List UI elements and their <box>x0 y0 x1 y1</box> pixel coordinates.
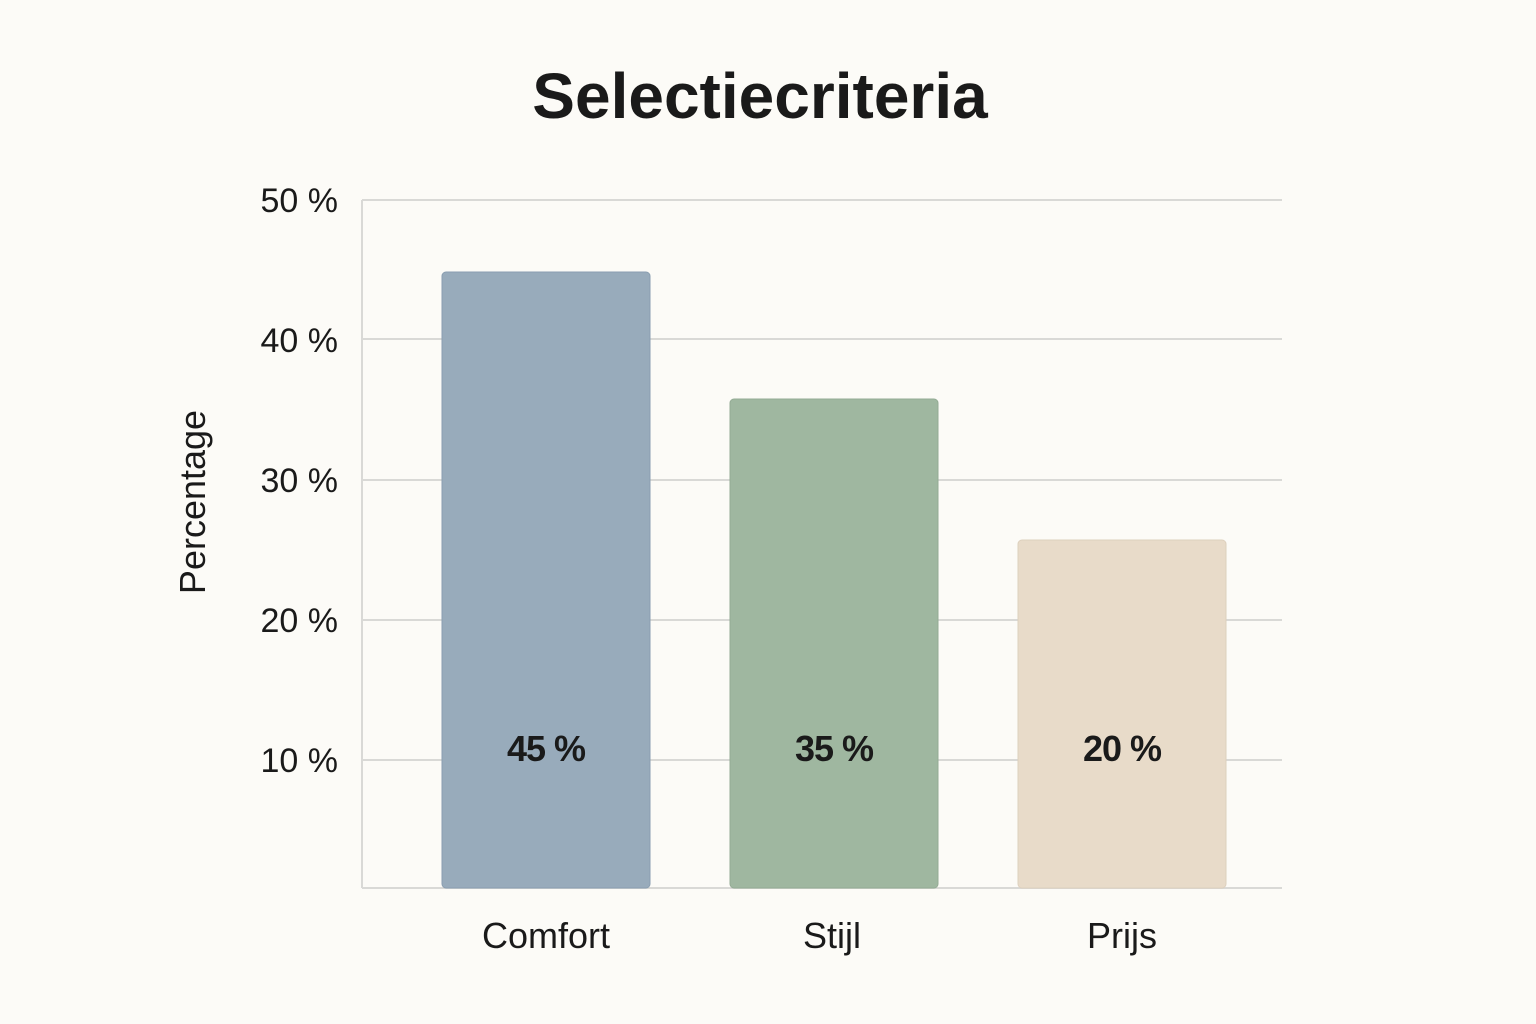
y axis labels: 40 % <box>260 322 338 360</box>
bar: Stijl <box>730 399 938 888</box>
bar: Comfort: 45 % <box>507 728 586 769</box>
y axis labels: 10 % <box>260 742 338 780</box>
bar chart <box>442 272 1226 888</box>
y axis labels <box>260 182 338 780</box>
y axis labels: 20 % <box>260 602 338 640</box>
y axis title: Percentage <box>172 410 213 594</box>
bar: Prijs <box>1018 540 1226 888</box>
bar: Comfort <box>442 272 650 888</box>
x axis labels: Prijs <box>1087 915 1157 956</box>
x axis labels: Stijl <box>803 915 861 956</box>
x axis labels <box>482 915 1157 956</box>
y axis labels: 30 % <box>260 462 338 500</box>
y axis labels: 50 % <box>260 182 338 220</box>
bar: Prijs: 20 % <box>1083 728 1162 769</box>
x axis labels: Comfort <box>482 915 610 956</box>
title: Selectiecriteria <box>532 60 988 132</box>
bar: Stijl: 35 % <box>795 728 874 769</box>
